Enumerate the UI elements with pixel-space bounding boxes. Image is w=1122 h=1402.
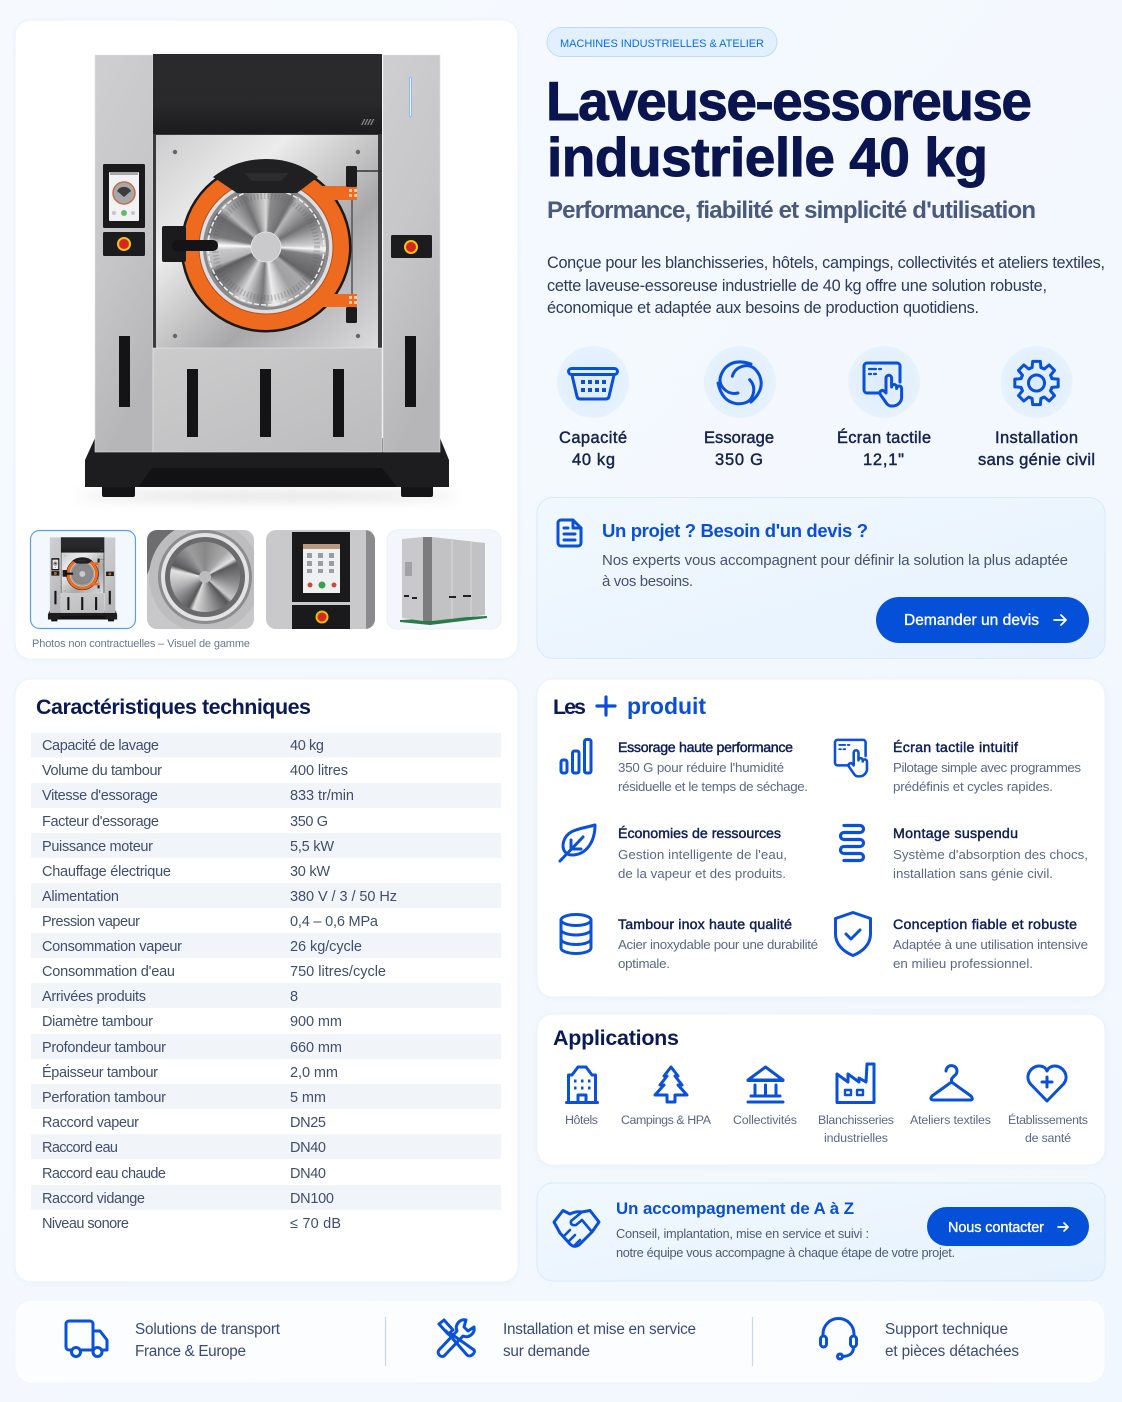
badge: category: MACHINES INDUSTRIELLES & ATELIER bbox=[560, 38, 764, 50]
title: industrielle 40 kg bbox=[547, 126, 988, 188]
row: drum depth: 660 mm bbox=[290, 1040, 342, 1056]
icon: handshake bbox=[554, 1210, 599, 1246]
row: spin factor: 350 G bbox=[290, 814, 328, 830]
application: textile workshops: Ateliers textiles bbox=[910, 1113, 991, 1127]
icon: shield check bbox=[836, 912, 870, 956]
row: drain connection: DN100 bbox=[290, 1191, 334, 1207]
row: motor power: Puissance moteur bbox=[42, 839, 153, 855]
row: steam pressure: Pression vapeur bbox=[42, 914, 140, 930]
row: capacity bbox=[42, 738, 324, 754]
machine shadow bbox=[77, 492, 457, 500]
row: capacity: Capacité de lavage bbox=[42, 738, 159, 754]
service: installation: Installation et mise en service bbox=[503, 1321, 696, 1338]
row: power supply: 380 V / 3 / 50 Hz bbox=[290, 889, 397, 905]
heading: Un projet ? Besoin d'un devis ? bbox=[602, 520, 868, 541]
row: power supply: Alimentation bbox=[42, 889, 119, 905]
row: spin factor bbox=[42, 814, 328, 830]
icon: leaf bbox=[560, 825, 595, 861]
key feature: touch screen: 12,1" bbox=[863, 451, 904, 469]
service: transport: France & Europe bbox=[135, 1343, 246, 1360]
icon: bars bbox=[561, 740, 591, 773]
button: contact bbox=[927, 1207, 1089, 1246]
advantage: intuitive touch screen: Écran tactile intuitif bbox=[893, 739, 1018, 756]
heading: Un accompagnement de A à Z bbox=[616, 1199, 854, 1218]
application: healthcare: Établissements bbox=[1008, 1112, 1088, 1127]
panel: technical specifications bbox=[15, 679, 518, 1282]
icon: gear bbox=[1015, 361, 1058, 405]
row: drain connection bbox=[42, 1191, 334, 1207]
key feature: installation bbox=[978, 346, 1095, 469]
icon: headset bbox=[820, 1318, 856, 1359]
body text bbox=[602, 552, 1068, 590]
thumbnail 1: front view, selected bbox=[30, 530, 136, 628]
row: power supply bbox=[42, 889, 397, 905]
icon: touch screen bbox=[864, 363, 902, 406]
panel: end-to-end support bbox=[537, 1183, 1105, 1281]
panel: product advantages bbox=[537, 679, 1105, 997]
product photo: washing machine bbox=[85, 54, 449, 497]
row: water connection: Raccord eau bbox=[42, 1140, 118, 1156]
row: water consumption bbox=[42, 964, 386, 980]
row: spin factor: Facteur d'essorage bbox=[42, 814, 159, 830]
advantage: suspended mounting bbox=[841, 826, 1088, 881]
key feature: touch screen bbox=[837, 346, 931, 469]
icon: document bbox=[558, 520, 581, 546]
row: product inlets: Arrivées produits bbox=[42, 989, 146, 1005]
advantage: reliable design bbox=[836, 912, 1088, 971]
key feature: capacity bbox=[557, 346, 629, 469]
row: spin speed bbox=[42, 788, 354, 804]
photo disclaimer: Photos non contractuelles – Visuel de gamme bbox=[32, 638, 250, 650]
advantage: suspended mounting: Montage suspendu bbox=[893, 826, 1018, 842]
service: transport: Solutions de transport bbox=[135, 1321, 281, 1338]
row: steam pressure bbox=[42, 914, 379, 930]
title bbox=[546, 70, 1032, 188]
row: drum perforation bbox=[42, 1090, 326, 1106]
row: water consumption: Consommation d'eau bbox=[42, 964, 175, 980]
application: campsites bbox=[621, 1067, 712, 1127]
key feature: capacity: 40 kg bbox=[572, 451, 615, 469]
row: steam connection: DN25 bbox=[290, 1115, 326, 1131]
icon: crossed tools bbox=[438, 1320, 474, 1356]
advantage: intuitive touch screen bbox=[835, 739, 1081, 794]
advantage: high spin performance: 350 G pour réduire l'humidité bbox=[618, 760, 784, 775]
row: hot water connection: Raccord eau chaude bbox=[42, 1166, 166, 1182]
heading bbox=[553, 693, 706, 719]
panel: services footer bbox=[15, 1300, 1105, 1383]
intro paragraph: Conçue pour les blanchisseries, hôtels, campings, collectivités et ateliers textiles, bbox=[547, 254, 1105, 272]
advantage: resource savings bbox=[560, 825, 787, 881]
thumbnail 2: drum close-up bbox=[147, 530, 254, 629]
application: hotels bbox=[565, 1067, 598, 1127]
row: steam connection: Raccord vapeur bbox=[42, 1115, 139, 1131]
intro paragraph bbox=[547, 254, 1105, 317]
button: request quote bbox=[876, 597, 1089, 643]
advantage: resource savings: Économies de ressources bbox=[618, 825, 781, 842]
body text: Nos experts vous accompagnent pour définir la solution la plus adaptée bbox=[602, 552, 1068, 569]
icon: stacked drum bbox=[561, 914, 591, 954]
row: electric heating bbox=[42, 864, 330, 880]
row: steam consumption bbox=[42, 939, 362, 955]
row: water consumption: 750 litres/cycle bbox=[290, 964, 386, 980]
key feature: touch screen: Écran tactile bbox=[837, 428, 931, 447]
advantage: reliable design: en milieu professionnel. bbox=[893, 956, 1033, 971]
row: drum thickness: Épaisseur tambour bbox=[42, 1064, 158, 1081]
row: motor power bbox=[42, 839, 334, 855]
thumbnail 3: control screen bbox=[266, 530, 375, 629]
row: motor power: 5,5 kW bbox=[290, 839, 334, 855]
row: noise level bbox=[42, 1216, 341, 1232]
key feature: spin: 350 G bbox=[715, 451, 763, 469]
row: drum diameter: Diamètre tambour bbox=[42, 1014, 153, 1030]
key feature: installation: sans génie civil bbox=[978, 451, 1095, 469]
key feature: spin bbox=[704, 346, 776, 469]
body text bbox=[616, 1226, 955, 1260]
button: contact: Nous contacter bbox=[948, 1220, 1044, 1236]
panel: product gallery bbox=[15, 20, 518, 659]
specification table bbox=[31, 733, 501, 1232]
key feature: installation: Installation bbox=[995, 429, 1078, 447]
application: hotels: Hôtels bbox=[565, 1113, 598, 1127]
badge: category bbox=[547, 28, 777, 56]
service: installation: sur demande bbox=[503, 1343, 590, 1360]
heading: produit bbox=[627, 693, 706, 719]
row: drum perforation: Perforation tambour bbox=[42, 1090, 166, 1106]
application: healthcare: de santé bbox=[1025, 1131, 1071, 1145]
service: transport bbox=[66, 1321, 281, 1360]
icon: truck bbox=[66, 1321, 107, 1356]
row: water connection: DN40 bbox=[290, 1140, 326, 1156]
service: support bbox=[820, 1318, 1019, 1360]
row: product inlets: 8 bbox=[290, 989, 298, 1005]
application: industrial laundries: industrielles bbox=[824, 1131, 888, 1145]
row: steam pressure: 0,4 – 0,6 MPa bbox=[290, 914, 379, 930]
application: textile workshops bbox=[910, 1066, 991, 1127]
row: water connection bbox=[42, 1140, 326, 1156]
icon: touch screen bbox=[835, 740, 867, 776]
body text: Conseil, implantation, mise en service et suivi : bbox=[616, 1226, 869, 1241]
key feature: spin: Essorage bbox=[704, 429, 774, 447]
panel: quote request bbox=[537, 498, 1105, 658]
advantage: resource savings: de la vapeur et des produits. bbox=[618, 866, 786, 881]
intro paragraph: économique et adaptée aux besoins de production quotidiens. bbox=[547, 299, 979, 317]
advantage: stainless drum: Acier inoxydable pour une durabilité bbox=[618, 937, 818, 952]
icon: laundry basket bbox=[568, 368, 618, 399]
body text: à vos besoins. bbox=[602, 573, 693, 590]
icon: spin swirl bbox=[716, 360, 768, 411]
service: installation bbox=[438, 1320, 696, 1360]
row: noise level: ≤ 70 dB bbox=[290, 1216, 341, 1232]
application: campsites: Campings & HPA bbox=[621, 1113, 712, 1127]
heading: Applications bbox=[553, 1026, 679, 1050]
row: drum thickness: 2,0 mm bbox=[290, 1065, 338, 1081]
advantage: high spin performance: résiduelle et le temps de séchage. bbox=[618, 779, 808, 794]
row: drum volume: Volume du tambour bbox=[42, 763, 162, 779]
button: request quote: Demander un devis bbox=[904, 612, 1039, 629]
row: steam consumption: Consommation vapeur bbox=[42, 939, 182, 955]
application: industrial laundries bbox=[818, 1064, 894, 1145]
row: steam connection bbox=[42, 1115, 326, 1131]
advantage: reliable design: Adaptée à une utilisation intensive bbox=[893, 937, 1088, 952]
advantage: stainless drum bbox=[561, 914, 818, 971]
thumbnail 4: machine side view bbox=[387, 530, 501, 629]
row: hot water connection bbox=[42, 1166, 326, 1182]
advantage: stainless drum: optimale. bbox=[618, 956, 670, 971]
title: Laveuse-essoreuse bbox=[546, 70, 1032, 132]
row: noise level: Niveau sonore bbox=[42, 1216, 129, 1232]
advantage: intuitive touch screen: prédéfinis et cycles rapides. bbox=[893, 779, 1053, 794]
row: product inlets bbox=[42, 989, 298, 1005]
intro paragraph: cette laveuse-essoreuse industrielle de 40 kg offre une solution robuste, bbox=[547, 277, 1047, 295]
row: drum depth bbox=[42, 1040, 342, 1056]
row: drum diameter: 900 mm bbox=[290, 1014, 342, 1030]
body text: notre équipe vous accompagne à chaque étape de votre projet. bbox=[616, 1245, 955, 1260]
row: electric heating: 30 kW bbox=[290, 864, 330, 880]
advantage: suspended mounting: installation sans génie civil. bbox=[893, 866, 1053, 881]
row: spin speed: Vitesse d'essorage bbox=[42, 788, 158, 804]
row: capacity: 40 kg bbox=[290, 738, 324, 754]
advantage: high spin performance bbox=[561, 740, 808, 794]
row: drum volume: 400 litres bbox=[290, 763, 348, 779]
application: communities bbox=[733, 1067, 797, 1127]
advantage: high spin performance: Essorage haute performance bbox=[618, 740, 793, 756]
row: electric heating: Chauffage électrique bbox=[42, 864, 171, 880]
subtitle: Performance, fiabilité et simplicité d'utilisation bbox=[547, 197, 1036, 224]
row: drum depth: Profondeur tambour bbox=[42, 1040, 166, 1056]
advantage: stainless drum: Tambour inox haute qualité bbox=[618, 917, 792, 933]
row: hot water connection: DN40 bbox=[290, 1166, 326, 1182]
advantage: intuitive touch screen: Pilotage simple avec programmes bbox=[893, 760, 1081, 775]
advantage: resource savings: Gestion intelligente de l'eau, bbox=[618, 847, 787, 862]
row: drum diameter bbox=[42, 1014, 342, 1030]
row: drum perforation: 5 mm bbox=[290, 1090, 326, 1106]
heading: Caractéristiques techniques bbox=[36, 695, 311, 719]
application: communities: Collectivités bbox=[733, 1113, 797, 1127]
service: support: Support technique bbox=[885, 1321, 1008, 1338]
advantage: reliable design: Conception fiable et robuste bbox=[893, 917, 1077, 933]
row: spin speed: 833 tr/min bbox=[290, 788, 354, 804]
row: steam consumption: 26 kg/cycle bbox=[290, 939, 362, 955]
key feature: capacity: Capacité bbox=[559, 429, 627, 447]
icon: spring bbox=[841, 826, 864, 860]
row: drum thickness bbox=[42, 1064, 338, 1081]
row: drum volume bbox=[42, 763, 348, 779]
panel: applications bbox=[537, 1014, 1105, 1165]
application: industrial laundries: Blanchisseries bbox=[818, 1113, 894, 1127]
application: healthcare bbox=[1008, 1066, 1088, 1145]
heading: Les bbox=[553, 695, 586, 719]
service: support: et pièces détachées bbox=[885, 1343, 1019, 1360]
row: drain connection: Raccord vidange bbox=[42, 1191, 145, 1207]
advantage: suspended mounting: Système d'absorption des chocs, bbox=[893, 847, 1088, 862]
